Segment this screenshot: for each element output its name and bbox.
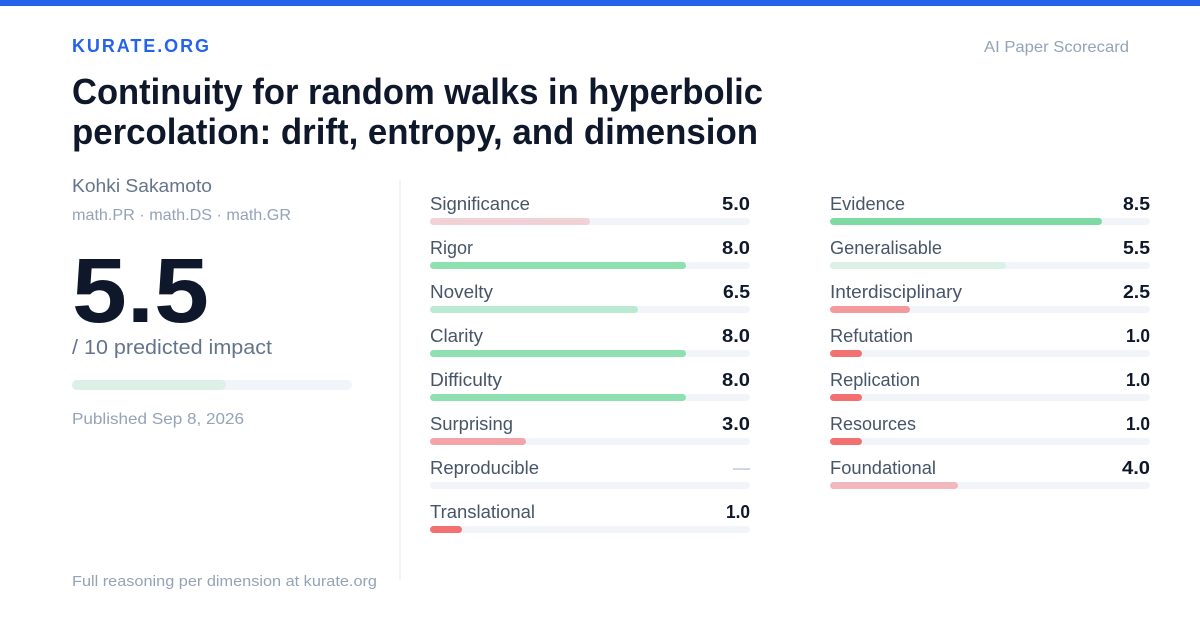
row: Reproducible no score [430, 458, 750, 489]
row: Foundational 4.0: Foundational [830, 458, 936, 478]
row: Evidence 8.5 [830, 194, 1150, 225]
row: Generalisable 5.5: Generalisable [830, 238, 942, 258]
categories: math.PR · math.DS · math.GR [72, 207, 291, 224]
row: Interdisciplinary 2.5: Interdisciplinary [830, 282, 962, 302]
publication date: Published Sep 8, 2026 [72, 411, 244, 428]
row: Resources 1.0: 1.0 [1126, 414, 1150, 434]
title [72, 71, 763, 152]
row: Difficulty 8.0: 8.0 [722, 370, 750, 390]
row: Translational 1.0: 1.0 [726, 502, 750, 522]
row: Translational 1.0 [430, 502, 750, 533]
panel: scores right column [830, 194, 1150, 489]
overall score: 5.5 [72, 240, 209, 342]
title: Continuity for random walks in hyperbolic [72, 71, 763, 112]
row: Difficulty 8.0 [430, 370, 750, 401]
row: Difficulty 8.0: Difficulty [430, 370, 502, 390]
row: Rigor 8.0: 8.0 [722, 238, 750, 258]
row: Reproducible no score: — [733, 458, 750, 478]
score caption: / 10 predicted impact [72, 337, 272, 359]
row: Interdisciplinary 2.5 [830, 282, 1150, 313]
brand: kurate.org: KURATE.ORG [72, 36, 209, 56]
author: Kohki Sakamoto [72, 176, 212, 196]
row: Surprising 3.0 [430, 414, 750, 445]
row: Surprising 3.0: 3.0 [722, 414, 750, 434]
row: Surprising 3.0: Surprising [430, 414, 513, 434]
row: Significance 5.0: Significance [430, 194, 530, 214]
row: Foundational 4.0 [830, 458, 1150, 489]
row: Novelty 6.5: Novelty [430, 282, 493, 302]
footer note: Full reasoning per dimension at kurate.org [72, 573, 377, 590]
row: Replication 1.0 [830, 370, 1150, 401]
row: Novelty 6.5 [430, 282, 750, 313]
row: Resources 1.0: Resources [830, 414, 916, 434]
row: Significance 5.0: 5.0 [722, 194, 750, 214]
row: Rigor 8.0: Rigor [430, 238, 473, 258]
row: Significance 5.0 [430, 194, 750, 225]
row: Foundational 4.0: 4.0 [1122, 458, 1150, 478]
title: percolation: drift, entropy, and dimension [72, 111, 758, 152]
row: Clarity 8.0: Clarity [430, 326, 483, 346]
panel: scores left column [430, 194, 750, 533]
row: Evidence 8.5: Evidence [830, 194, 905, 214]
row: Reproducible no score: Reproducible [430, 458, 539, 478]
overall score bar [72, 380, 352, 390]
row: Translational 1.0: Translational [430, 502, 535, 522]
row: Novelty 6.5: 6.5 [723, 282, 750, 302]
row: Evidence 8.5: 8.5 [1123, 194, 1150, 214]
row: Resources 1.0 [830, 414, 1150, 445]
row: Refutation 1.0: Refutation [830, 326, 913, 346]
row: Generalisable 5.5: 5.5 [1123, 238, 1150, 258]
row: Generalisable 5.5 [830, 238, 1150, 269]
row: Interdisciplinary 2.5: 2.5 [1123, 282, 1150, 302]
row: Refutation 1.0: 1.0 [1126, 326, 1150, 346]
row: Replication 1.0: 1.0 [1126, 370, 1150, 390]
row: Rigor 8.0 [430, 238, 750, 269]
row: Refutation 1.0 [830, 326, 1150, 357]
row: Replication 1.0: Replication [830, 370, 920, 390]
row: Clarity 8.0: 8.0 [722, 326, 750, 346]
label: AI Paper Scorecard: AI Paper Scorecard [984, 39, 1129, 56]
panel: paper summary [72, 176, 377, 590]
row: Clarity 8.0 [430, 326, 750, 357]
